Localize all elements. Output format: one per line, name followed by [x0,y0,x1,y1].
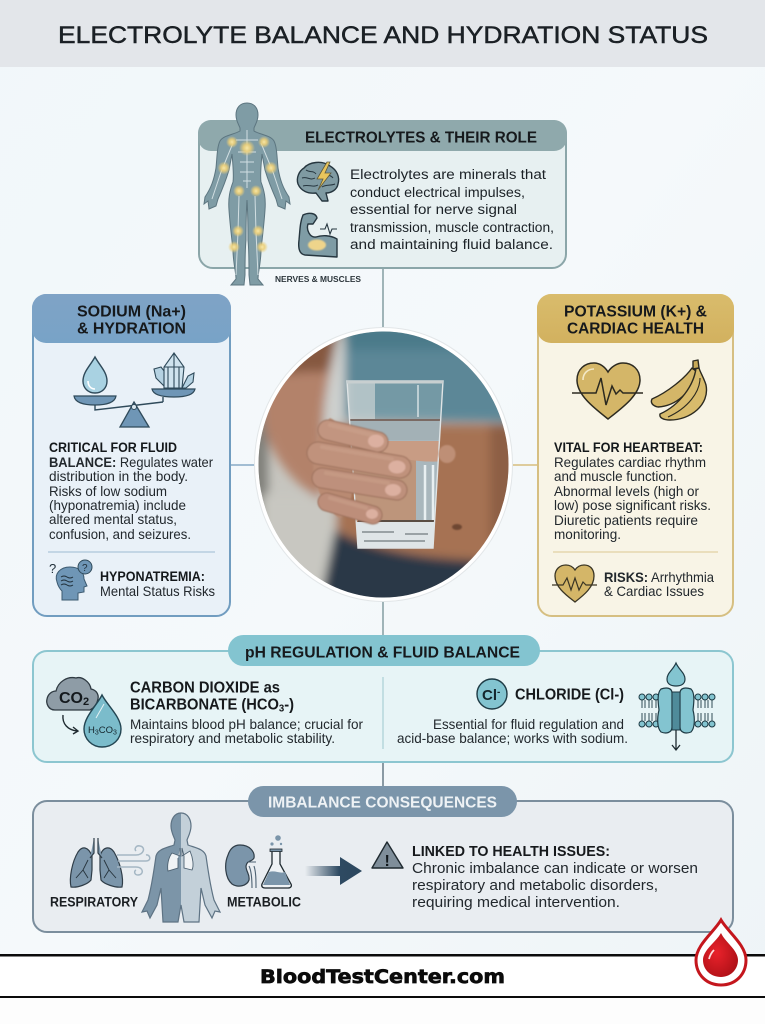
icon: chloride ion: Cl [482,687,497,704]
consequences text: LINKED TO HEALTH ISSUES: [412,844,610,860]
consequences text: Chronic imbalance can indicate or worsen [412,861,698,877]
description text: VITAL FOR HEARTBEAT: [554,440,703,455]
carbon dioxide text: -) [284,696,294,714]
description text: altered mental status, [49,512,177,527]
footer band [0,954,765,998]
panel: electrolytes and their role [198,103,567,285]
arrow [305,857,362,885]
title: ELECTROLYTE BALANCE AND HYDRATION STATUS [58,22,708,49]
icon: CO2 cloud to bicarbonate drop: CO [59,690,83,707]
description text: Electrolytes are minerals that [350,167,546,183]
label: respiratory: RESPIRATORY [50,894,138,910]
callout: risks: & Cardiac Issues [604,584,704,599]
description text: Abnormal levels (high or [554,484,699,499]
panel: sodium and hydration [32,294,231,616]
hand and fingers [314,418,406,519]
consequences text: requiring medical intervention. [412,895,620,911]
blurred background: arm, shirt, torso, trousers [258,332,508,598]
panel header [198,120,567,151]
icon: bananas [651,360,707,420]
description text: BALANCE: Regulates water [49,455,213,470]
icon: membrane channel [639,663,715,750]
carbon dioxide text: 3 [279,702,284,714]
description text: Regulates cardiac rhythm [554,455,706,470]
icon: brain with lightning [297,162,339,201]
section pill: IMBALANCE CONSEQUENCES [268,794,497,812]
icon: warning triangle: ! [384,853,390,870]
panel: pH regulation and fluid balance [33,635,733,762]
description text [49,440,213,542]
section pill [248,786,517,817]
consequences text: respiratory and metabolic disorders, [412,878,658,894]
description text: Risks of low sodium [49,484,167,499]
description text: and maintaining fluid balance. [350,237,553,253]
chloride text: acid-base balance; works with sodium. [397,731,628,746]
heading: CARDIAC HEALTH [567,320,704,338]
icon: warning triangle [372,842,403,870]
glass of water [345,380,445,549]
caption: NERVES & MUSCLES [275,274,361,284]
icon: confused head [49,560,92,600]
callout: risks [604,570,714,599]
section pill [228,635,540,666]
chloride text [397,686,628,746]
description text: distribution in the body. [49,469,188,484]
carbon dioxide text: respiratory and metabolic stability. [130,731,335,746]
carbon dioxide text: Maintains blood pH balance; crucial for [130,717,363,732]
callout: risks: RISKS: Arrhythmia [604,570,714,585]
connector lines [230,268,538,787]
icon: heart with pulse [572,363,643,419]
callout: hyponatremia: Mental Status Risks [100,584,215,599]
icon: CO2 cloud to bicarbonate drop: 3 [113,730,117,736]
icon: CO2 cloud to bicarbonate drop: CO [99,725,113,736]
description text: essential for nerve signal [350,202,517,218]
label: metabolic: METABOLIC [227,894,301,910]
icon: balance scale with water and crystals [74,353,195,427]
chloride text: Essential for fluid regulation and [433,717,624,732]
description text: CRITICAL FOR FLUID [49,440,177,455]
description text: and muscle function. [554,469,677,484]
description text: Diuretic patients require [554,513,698,528]
heading [77,304,186,338]
description text [554,440,711,542]
logo: blood drop [696,920,746,985]
icon: human body with nerves [204,103,290,285]
description text: confusion, and seizures. [49,527,191,542]
icon: confused head: ? [49,561,56,576]
callout: hyponatremia [100,569,215,599]
description text [350,167,554,253]
panel: imbalance consequences [33,786,733,932]
description text: transmission, muscle contraction, [350,220,554,236]
heading: & HYDRATION [77,320,186,338]
icon: CO2 cloud to bicarbonate drop: 3 [95,730,99,736]
icon: confused head: ? [82,563,88,574]
heading: POTASSIUM (K+) & [564,304,707,320]
panel header [32,294,231,343]
icon: body with lungs [142,813,220,922]
consequences text [412,844,698,911]
heading [564,304,707,338]
title band [0,0,765,67]
icon: chloride ion: - [497,687,500,698]
icon: kidney and flask [226,835,291,888]
photo: hand holding a glass of water [254,327,513,602]
icon: CO2 cloud to bicarbonate drop: H [88,725,95,736]
footer brand text: BloodTestCenter.com [260,966,505,988]
description text: conduct electrical impulses, [350,185,525,201]
panel header [537,294,734,343]
icon: small heart with arrhythmia pulse [552,565,597,602]
icon: flexed muscle [299,213,337,257]
carbon dioxide text: BICARBONATE (HCO [130,696,292,714]
heading: SODIUM (Na+) [77,304,186,320]
description text: low) pose significant risks. [554,498,711,513]
carbon dioxide text [130,680,363,746]
callout: hyponatremia: HYPONATREMIA: [100,569,205,584]
heading: ELECTROLYTES & THEIR ROLE [305,130,537,146]
icon: chloride ion [477,679,507,709]
icon: CO2 cloud to bicarbonate drop: 2 [83,696,89,708]
icon: CO2 cloud to bicarbonate drop [47,678,121,747]
icon: lungs and breath [70,838,150,887]
panel: potassium and cardiac health [537,294,734,616]
section pill: pH REGULATION & FLUID BALANCE [245,644,520,662]
description text: monitoring. [554,527,621,542]
chloride text: CHLORIDE (Cl-) [515,686,624,704]
description text: (hyponatremia) include [49,498,186,513]
carbon dioxide text: CARBON DIOXIDE as [130,680,280,696]
